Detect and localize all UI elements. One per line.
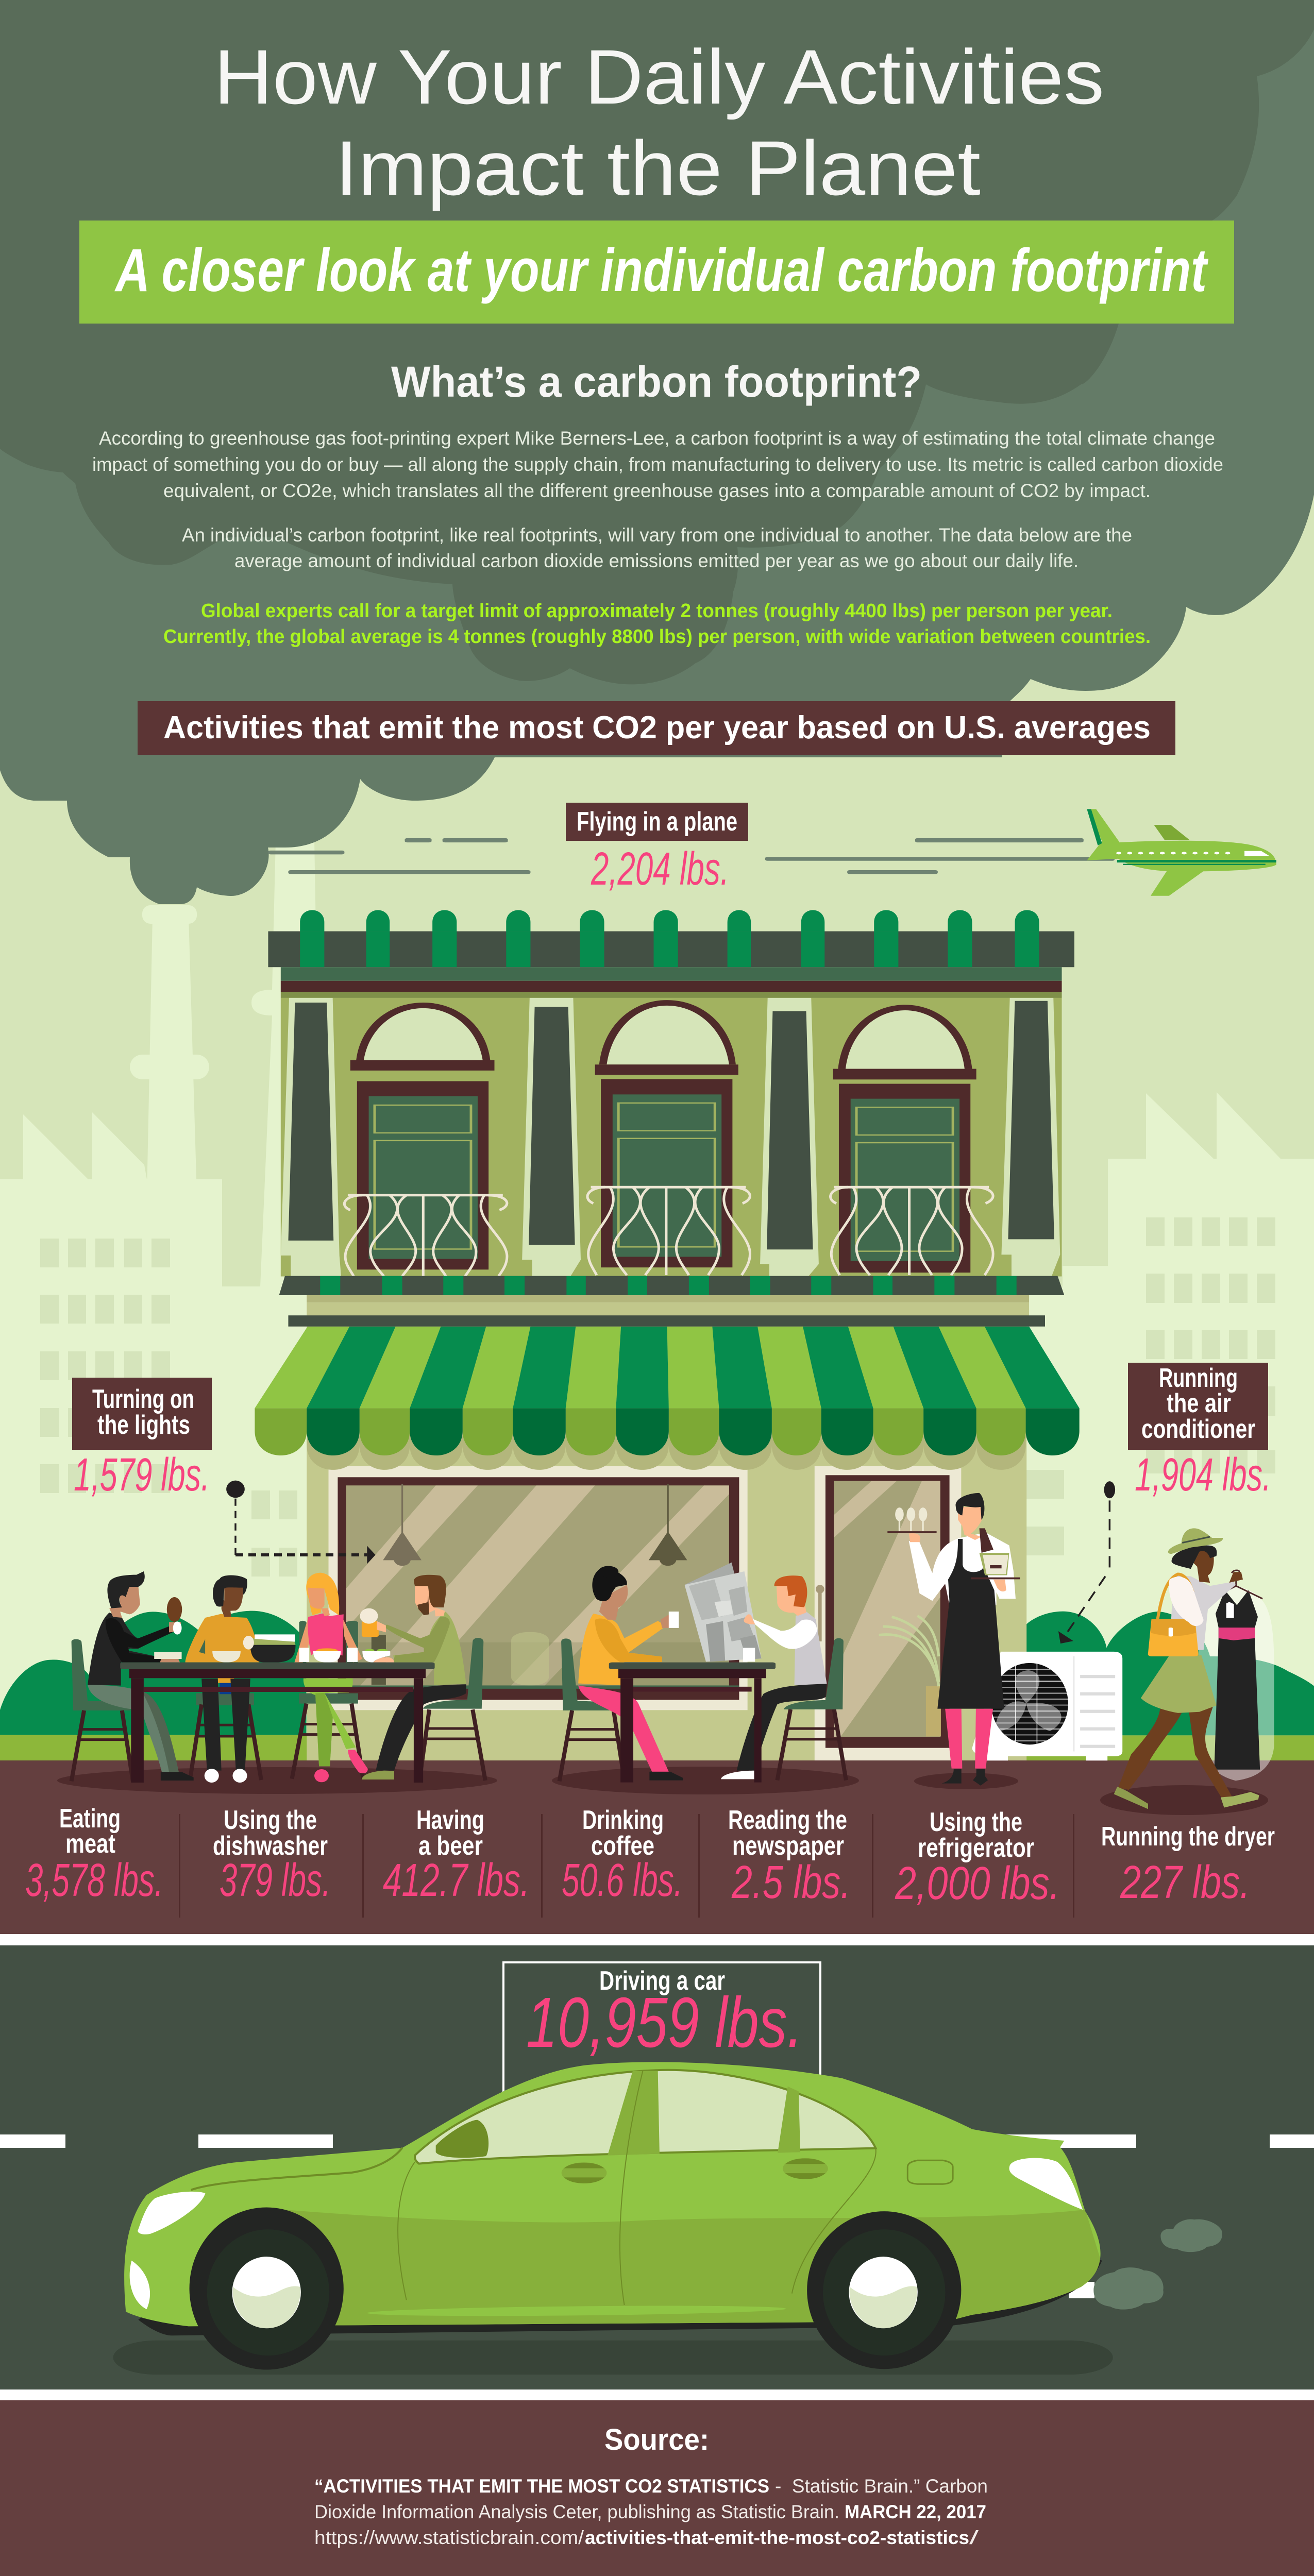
title: How Your Daily Activities: [214, 33, 1104, 120]
highlighted target statement: Currently, the global average is 4 tonnes (roughly 8800 lbs) per person, with wide variation between countries.: [163, 626, 1151, 648]
tableware: [243, 1634, 390, 1663]
balcony railings: [344, 1187, 993, 1276]
callout: running the air conditioner: the air: [1167, 1388, 1231, 1418]
awning scallops: [255, 1408, 1080, 1455]
second table: [609, 1663, 776, 1783]
stats: using the refrigerator: [895, 1807, 1060, 1909]
callout: turning on the lights: 1,579 lbs.: [74, 1449, 210, 1501]
car body: [124, 2062, 1101, 2326]
intro paragraph 1: impact of something you do or buy — all along the supply chain, from manufacturing to delivery to use. Its metric is called carbon dioxide: [92, 454, 1223, 475]
shop door: [815, 1466, 961, 1760]
awning stripes: [255, 1315, 1080, 1408]
shop window: [285, 1466, 748, 1710]
door handles: [562, 2158, 828, 2183]
callout: turning on the lights: Turning on: [92, 1384, 194, 1414]
arrow: lights pointer: [226, 1481, 376, 1564]
road lane markings: [0, 2134, 1314, 2298]
callout: turning on the lights: the lights: [97, 1410, 190, 1440]
stats: having a beer: 412.7 lbs.: [383, 1855, 530, 1906]
person: drinking coffee: [578, 1566, 683, 1781]
person: eating meat: [88, 1571, 194, 1781]
newspaper: [684, 1563, 762, 1662]
ground and shrubs behind the shop: [0, 1611, 1314, 1761]
pilasters: [281, 998, 1060, 1276]
flight speed lines: [268, 838, 1115, 874]
person: reading the newspaper: [721, 1575, 846, 1780]
stats: using the dishwasher: dishwasher: [213, 1831, 328, 1861]
callout: flying in a plane: 2,204 lbs.: [591, 843, 729, 895]
window 2: [595, 1000, 738, 1267]
stats: using the refrigerator: refrigerator: [918, 1833, 1034, 1863]
group at first table: [72, 1571, 625, 1783]
wheels: [190, 2207, 961, 2370]
stats: eating meat: meat: [65, 1829, 115, 1859]
intro paragraph 1: [92, 428, 1223, 501]
window 3: [833, 1005, 976, 1273]
air conditioner unit: [972, 1652, 1122, 1760]
person: having a beer: [294, 1573, 368, 1782]
city and factory silhouette: [0, 841, 1314, 1776]
wall: [281, 998, 1062, 1277]
door plant: [816, 1585, 941, 1736]
callout: flying in a plane: [566, 803, 748, 895]
title: Impact the Planet: [335, 125, 981, 211]
car illustration: [113, 2062, 1222, 2375]
group at second table and waiter: [609, 1493, 1274, 1809]
floor shadows: [57, 1767, 1268, 1815]
stats: using the dishwasher: 379 lbs.: [220, 1855, 331, 1906]
stats: drinking coffee: 50.6 lbs.: [562, 1855, 683, 1906]
person: man with beer mug: [360, 1575, 466, 1780]
stats: eating meat: 3,578 lbs.: [25, 1855, 163, 1906]
stats: reading the newspaper: 2.5 lbs.: [731, 1857, 851, 1908]
windows: [415, 2070, 875, 2164]
stats: having a beer: a beer: [418, 1831, 483, 1861]
first table: [120, 1663, 435, 1783]
door lines and trim: [191, 2071, 953, 2305]
woman with dry cleaning: [1114, 1528, 1274, 1809]
window 1: [350, 1003, 495, 1269]
stats: running the dryer: 227 lbs.: [1120, 1857, 1250, 1908]
reference 1: “ACTIVITIES THAT EMIT THE MOST CO2 STATISTICS: [314, 2476, 769, 2497]
stats: reading the newspaper: newspaper: [732, 1831, 844, 1861]
reference 1: [314, 2476, 988, 2548]
person: using the dishwasher: [186, 1575, 259, 1783]
roof with finials: [268, 910, 1074, 998]
white separator and road: [0, 1934, 1314, 2400]
stats: drinking coffee: coffee: [591, 1831, 654, 1861]
stats: reading the newspaper: [728, 1805, 851, 1908]
lights: [130, 2158, 1083, 2309]
reference 1: /: [969, 2527, 979, 2548]
stats: using the refrigerator: 2,000 lbs.: [895, 1858, 1060, 1909]
callout: turning on the lights: [72, 1378, 212, 1501]
arrow: air conditioner pointer: [1058, 1481, 1115, 1643]
callout: driving a car: Driving a car: [599, 1966, 725, 1996]
reference 1: Dioxide Information Analysis Ceter, publishing as Statistic Brain.: [314, 2501, 839, 2522]
source panel: [0, 2400, 1314, 2576]
stats: using the refrigerator: Using the: [930, 1807, 1022, 1837]
stats: running the dryer: [1101, 1822, 1275, 1908]
section banner: Activities that emit the most CO2 per year based on U.S. averages: [163, 710, 1151, 745]
stats: drinking coffee: Drinking: [582, 1805, 664, 1835]
stats: drinking coffee: [562, 1805, 683, 1906]
callout: running the air conditioner: [1128, 1363, 1271, 1501]
stats: having a beer: Having: [416, 1805, 484, 1835]
ground shadow: [113, 2341, 1113, 2375]
chair backs: [72, 1621, 625, 1781]
title: [214, 33, 1104, 211]
background sky: [0, 0, 1314, 1937]
callout: driving a car: 10,959 lbs.: [526, 1983, 803, 2062]
waiter: [887, 1493, 1020, 1786]
shop building: upper storey: [268, 910, 1074, 1316]
body lower shading: [285, 2210, 1100, 2326]
intro paragraph 2: An individual’s carbon footprint, like real footprints, will vary from one individual to another. The data below are the: [182, 524, 1132, 546]
subtitle banner: [79, 221, 1234, 324]
smoke cloud: dark layer: [0, 0, 1314, 684]
section banner: [138, 701, 1175, 755]
heading: what's a carbon footprint: What’s a carbon footprint?: [391, 358, 922, 406]
car underside: [138, 2228, 1102, 2335]
smoke cloud: light layer: [0, 0, 1314, 904]
highlighted target statement: Global experts call for a target limit of approximately 2 tonnes (roughly 4400 lbs) per person per year.: [201, 600, 1113, 622]
stats: using the dishwasher: Using the: [224, 1805, 317, 1835]
brown pavement: [0, 1760, 1314, 1934]
source heading: Source:: [604, 2423, 709, 2456]
stats: eating meat: Eating: [59, 1804, 121, 1834]
shop building: ground floor: [255, 1315, 1080, 1761]
callout: driving a car: [503, 1962, 820, 2096]
stats: eating meat: [25, 1804, 163, 1906]
intro paragraph 2: [182, 524, 1132, 571]
cornice: [279, 1276, 1064, 1316]
pendant lamps: [383, 1484, 687, 1566]
callout: running the air conditioner: conditioner: [1141, 1414, 1255, 1444]
reference 1: MARCH 22, 2017: [845, 2501, 986, 2522]
stats: using the dishwasher: [213, 1805, 331, 1906]
reference 1: activities-that-emit-the-most-co2-statistics: [585, 2527, 969, 2548]
reference 1: - Statistic Brain.” Carbon: [775, 2476, 988, 2497]
icon: airplane: [1087, 809, 1276, 896]
stats: reading the newspaper: Reading the: [728, 1805, 847, 1835]
highlighted target statement: [163, 600, 1151, 648]
intro paragraph 1: equivalent, or CO2e, which translates all the different greenhouse gases into a comparable amount of CO2 by impact.: [163, 480, 1151, 501]
exhaust smoke: [1093, 2219, 1222, 2310]
intro paragraph 2: average amount of individual carbon dioxide emissions emitted per year as we go about our daily life.: [234, 550, 1079, 571]
reference 1: https://www.statisticbrain.com/: [314, 2527, 584, 2548]
stats: having a beer: [383, 1805, 530, 1906]
callout: flying in a plane: Flying in a plane: [577, 807, 737, 837]
intro paragraph 1: According to greenhouse gas foot-printing expert Mike Berners-Lee, a carbon footprint is a way of estimating the total climate change: [99, 428, 1215, 449]
sill highlight: [367, 2304, 786, 2317]
callout: running the air conditioner: Running: [1159, 1363, 1238, 1393]
awning shadow: [307, 1408, 1026, 1470]
